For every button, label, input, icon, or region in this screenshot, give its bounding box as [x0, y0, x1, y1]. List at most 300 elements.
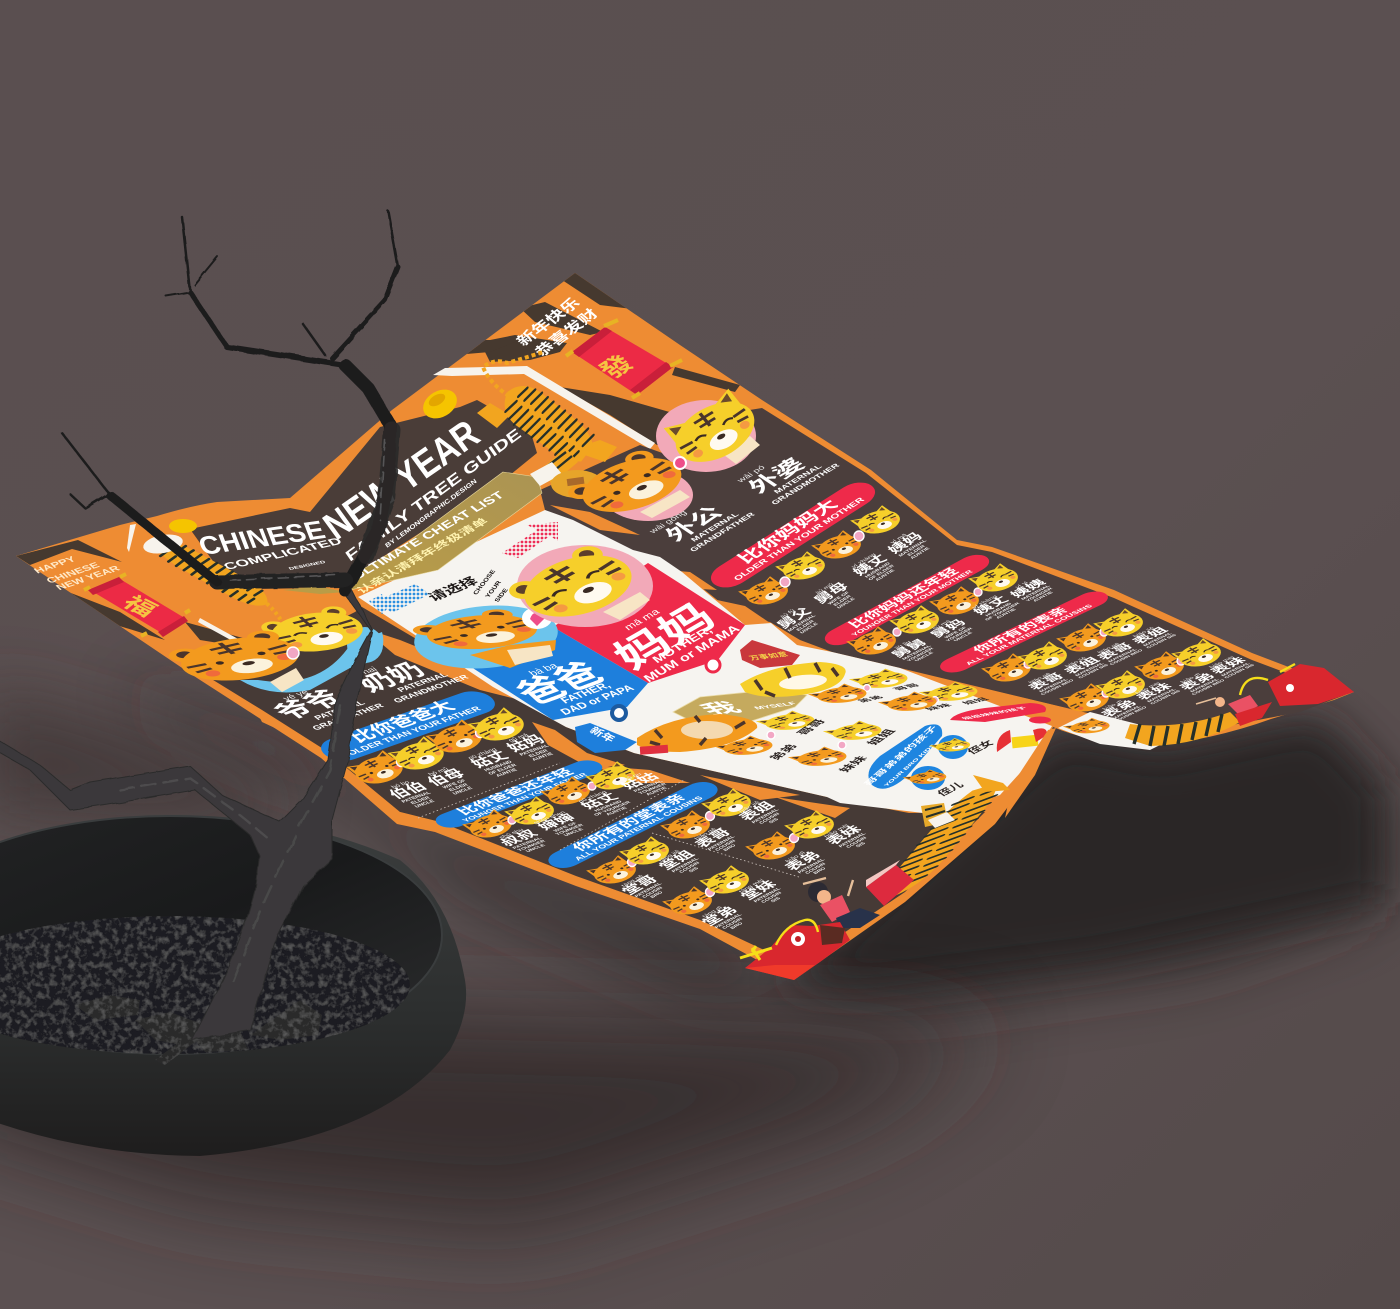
family list: maternal younger than mother: [818, 551, 1061, 666]
title: Chinese: CHINESE: [195, 516, 329, 561]
pill: your sis kids: 姐姐妹妹的孩子: [959, 706, 1029, 720]
family list: maternal younger than mother: HUSBAND: [985, 602, 1013, 617]
family list: siblings on white panel: 妹妹: [922, 703, 955, 711]
family list: paternal older than father: PATERNAL: [400, 791, 433, 804]
family list: maternal younger than mother: OF YOUNGER: [984, 602, 1022, 622]
family list: paternal older than father: 伯母: [423, 767, 469, 788]
family list: paternal younger than father: [427, 756, 675, 856]
greeting: happy chinese new year: [32, 555, 123, 592]
pill: your bro kids: YOUR BRO KIDS: [883, 743, 937, 788]
family list: paternal cousins: PATERNAL: [751, 808, 780, 824]
kids circles: 侄女: [964, 738, 996, 756]
family list: maternal younger than mother: UNCLE: [914, 651, 936, 662]
panel: central white panel: [358, 510, 1052, 813]
pill: all your paternal cousins: 你所有的堂表亲: [568, 791, 690, 854]
family list: siblings on white panel: 妹妹: [835, 755, 871, 773]
family list: paternal younger than father: shū shu: [498, 828, 526, 840]
pill: all your maternal cousins: 你所有的表亲: [969, 605, 1072, 655]
pill: your bro kids: 哥哥弟弟的孩子: [862, 724, 940, 787]
panel: mother red: [553, 563, 745, 683]
family list: maternal cousins: COUSIN BRO: [1109, 649, 1145, 666]
tree: [0, 211, 398, 1040]
panel: right family panel background: [540, 408, 1345, 735]
pill: older than your father: [312, 687, 503, 765]
bowl: [0, 815, 466, 1156]
tree trunk: [0, 588, 372, 1040]
family list: maternal cousins: biǎo mèi: [1134, 682, 1162, 695]
family list: paternal older than father: ELDER: [448, 783, 470, 793]
tag: blue new year lantern: 新年: [587, 725, 618, 744]
family list: paternal younger than father: UNCLE: [563, 827, 586, 837]
family list: maternal cousins: biǎo dì: [1180, 673, 1203, 684]
family list: paternal older than father: 姑妈: [503, 732, 549, 754]
family list: paternal older than father: gū mā: [507, 733, 531, 743]
pill: younger than your mother: [818, 551, 996, 649]
choose your side text: CHOOSE: [472, 569, 498, 596]
family list: paternal cousins: 表姐: [735, 799, 778, 823]
tiger pairs: [584, 787, 842, 919]
grandparents labels: PATERNAL: [395, 671, 451, 693]
panel: left family panel background: [205, 607, 985, 965]
family list: paternal cousins: biǎo jiě: [738, 800, 762, 814]
gold tag: myself: [673, 690, 807, 723]
banner: red scroll fa: 發: [593, 351, 640, 383]
family list: maternal cousins: COUSIN SIS: [1145, 634, 1178, 649]
family list: siblings on white panel: 哥哥: [891, 683, 923, 691]
kids circles: [901, 735, 996, 798]
family list: maternal cousins: biǎo mèi: [1208, 656, 1236, 669]
family list: paternal cousins: BRO: [649, 891, 665, 899]
icon: heart bead: [674, 457, 686, 469]
family list: maternal younger than mother: 姨丈: [970, 594, 1012, 617]
panel: title header: [190, 400, 537, 578]
family list: paternal cousins: PATERNAL: [707, 835, 736, 851]
orange border wedges: [255, 505, 1114, 825]
choose your side text: 请选择: [425, 574, 482, 604]
family list: paternal older than father: 姑丈: [467, 749, 513, 770]
family list: paternal cousins: biǎo mèi: [823, 823, 851, 839]
illustration: red dragon: [740, 920, 850, 980]
family list: maternal older than mother: 姨妈: [884, 530, 926, 556]
family list: maternal older than mother: MATERNAL: [787, 614, 817, 633]
designer credit: [288, 477, 478, 571]
subtitle: complicated: COMPLICATED: [220, 535, 345, 572]
family list: paternal younger than father: WIFE OF: [552, 822, 579, 833]
tiger pairs: [736, 504, 908, 609]
family list: paternal younger than father: shěn shen: [532, 810, 568, 825]
family list: paternal cousins: SIS: [770, 896, 783, 903]
family list: paternal older than father: HUSBAND: [483, 760, 514, 773]
family list: paternal cousins: táng gē: [620, 874, 646, 888]
family list: maternal younger than mother: yí zhàng: [971, 595, 999, 609]
family list: paternal cousins: biǎo gē: [693, 827, 719, 841]
family list: maternal younger than mother: YOUNGER: [1025, 587, 1055, 602]
family list: paternal cousins: PATERNAL: [753, 887, 782, 903]
family list: paternal younger than father: YOUNGER: [516, 839, 548, 852]
family list: maternal cousins: 表弟: [1175, 671, 1218, 692]
banner: red scroll fu: [84, 574, 190, 637]
tag: red lantern: 万事如意: [747, 651, 790, 662]
family list: paternal cousins: PATERNAL: [838, 832, 867, 848]
family list: maternal cousins: biǎo jiě: [1064, 656, 1089, 668]
family list: maternal younger than mother: jiù mā: [931, 619, 953, 631]
maternal grandparents labels: MATERNAL: [689, 511, 741, 543]
family list: maternal younger than mother: YOUNGER: [945, 627, 975, 642]
grandparents labels: 爷爷: [269, 686, 349, 725]
family list: maternal older than mother: UNCLE: [836, 596, 857, 610]
family list: maternal older than mother: yí mā: [889, 532, 909, 545]
family list: paternal cousins: COUSIN: [804, 862, 828, 875]
family list: paternal younger than father: 叔叔: [496, 828, 542, 848]
family list: maternal older than mother: ELDER: [832, 594, 853, 607]
family list: paternal cousins: táng jiě: [657, 849, 683, 863]
banner: red scroll fa: [566, 320, 682, 398]
family list: paternal cousins: COUSIN: [760, 891, 784, 904]
family list: paternal cousins: PATERNAL: [634, 882, 663, 898]
family list: paternal cousins: BRO: [722, 844, 738, 852]
family list: maternal cousins: 表妹: [1132, 681, 1176, 702]
choose your side text: YOUR: [484, 580, 503, 599]
illustration: mother tiger: [502, 542, 653, 629]
family list: maternal cousins: COUSIN BRO: [1040, 679, 1076, 696]
illustration: maternal grandparents tigers: [561, 387, 767, 522]
family list: paternal cousins: 堂哥: [619, 874, 661, 897]
family list: siblings on white panel: [712, 668, 992, 773]
family list: paternal cousins: 表弟: [781, 849, 824, 873]
greeting: top right: 新年快乐: [513, 295, 584, 349]
family list: maternal older than mother: UNCLE: [799, 621, 820, 635]
family list: paternal older than father: PATERNAL: [518, 744, 551, 757]
designer credit: BY LEMONGRAPHIC.DESIGN: [384, 477, 478, 549]
family list: maternal older than mother: ELDER: [906, 544, 927, 557]
pill: older than your father: OLDER THAN YOUR FATHER: [345, 705, 484, 757]
family list: paternal younger than father: AUNTIE: [605, 806, 630, 816]
grandparents labels: 奶奶: [352, 658, 432, 697]
icon: heart: [522, 607, 552, 629]
family list: paternal older than father: ELDER: [410, 796, 432, 806]
tiger stripes on poster border: [16, 272, 740, 650]
family list: maternal younger than mother: WIFE OF: [944, 627, 968, 639]
family list: siblings on white panel: 弟弟: [765, 743, 801, 761]
maternal grandparents labels: MATERNAL: [772, 463, 824, 495]
family list: maternal older than mother: [702, 477, 937, 639]
family list: maternal cousins: COUSIN SIS: [1223, 664, 1256, 679]
family list: maternal younger than mother: 舅舅: [888, 637, 930, 660]
pill: all your paternal cousins: ALL YOUR PATERNAL COUSINS: [573, 795, 705, 862]
family list: maternal cousins: MATERNAL: [1221, 662, 1252, 677]
illustration: drummer boy: [803, 878, 880, 928]
family list: maternal cousins: 表姐: [1128, 625, 1171, 646]
maternal grandparents labels: [646, 439, 841, 558]
family list: paternal older than father: bó mǔ: [427, 767, 451, 777]
family list: paternal cousins: [418, 763, 878, 935]
family list: maternal older than mother: ELDER: [795, 619, 816, 632]
family list: paternal cousins: PATERNAL: [671, 857, 700, 873]
tag: blue new year lantern: [575, 723, 637, 753]
family list: paternal younger than father: gū zhàng: [577, 790, 609, 804]
father label: FATHER,: [559, 681, 614, 706]
family list: maternal cousins: 表妹: [1206, 655, 1250, 676]
family list: maternal older than mother: HUSBAND: [865, 562, 892, 579]
family list: maternal younger than mother: 姨姨: [1007, 577, 1050, 600]
family list: maternal cousins: biǎo gē: [1028, 672, 1053, 684]
pill: older than your mother: 比你妈妈大: [734, 497, 843, 567]
family list: paternal older than father: gū zhàng: [467, 747, 499, 761]
family list: paternal younger than father: UNCLE: [525, 843, 548, 853]
family list: maternal cousins: MATERNAL: [1108, 648, 1139, 663]
family list: paternal cousins: COUSIN: [845, 836, 869, 849]
family list: maternal younger than mother: YOUNGER: [906, 647, 936, 662]
family list: paternal cousins: 堂弟: [698, 904, 741, 928]
family list: paternal older than father: WIFE OF: [441, 779, 468, 790]
father label: DAD or PAPA: [558, 683, 637, 717]
family list: maternal cousins: MATERNAL: [1112, 705, 1143, 720]
family list: paternal cousins: COUSIN: [714, 839, 738, 852]
illustration: lower right striped tiger: [870, 728, 1056, 903]
illustration: right fold tiger on white strip: [1058, 702, 1272, 750]
family list: maternal younger than mother: 舅妈: [927, 617, 969, 640]
family list: maternal cousins: COUSIN SIS: [1149, 690, 1182, 705]
family list: paternal younger than father: 姑姑: [617, 771, 663, 791]
maternal grandparents labels: wài gōng: [646, 509, 689, 535]
pill: your sis kids: [950, 703, 1051, 724]
tiger pairs: [979, 607, 1229, 716]
pill: younger than your father: YOUNGER THAN YOUR FATHER: [460, 772, 590, 823]
family list: maternal cousins: MATERNAL: [1039, 678, 1070, 693]
mother label: mā ma: [622, 607, 663, 633]
gold tag: ultimate cheat list: [283, 472, 542, 596]
family list: maternal younger than mother: AUNTIE: [995, 607, 1018, 620]
poster paper base: [16, 273, 1354, 980]
tiger pairs: [844, 562, 1026, 659]
family list: maternal cousins: biǎo jiě: [1132, 626, 1157, 638]
family list: maternal cousins: MATERNAL: [1075, 662, 1106, 677]
family list: paternal older than father: AUNTIE: [531, 752, 555, 762]
family list: paternal younger than father: gū gu: [622, 772, 644, 782]
family list: siblings on white panel: 姐姐: [960, 697, 992, 705]
family list: paternal cousins: táng mèi: [738, 878, 766, 894]
mother label: 妈妈: [605, 596, 725, 677]
pill: all your maternal cousins: ALL YOUR MATERNAL COUSINS: [964, 603, 1094, 666]
family list: paternal cousins: PATERNAL: [714, 913, 743, 929]
title: New Year: NEW YEAR: [316, 412, 487, 548]
pill: older than your father: 比你爸爸大: [345, 698, 460, 746]
choose your side text: SIDE: [494, 587, 510, 603]
family list: maternal cousins: [933, 588, 1257, 723]
family list: paternal cousins: BRO: [812, 867, 828, 875]
pill: younger than your father: 比你爸爸还年轻: [452, 766, 577, 817]
family list: maternal cousins: 表哥: [1024, 671, 1067, 692]
family list: maternal older than mother: 舅母: [811, 580, 852, 606]
pill: older than your mother: [702, 477, 883, 593]
icon: gold ingot left: [169, 519, 197, 533]
icon: rings on panels: [612, 658, 720, 720]
family list: paternal older than father: OF ELDER: [487, 763, 518, 776]
subtitle: family tree guide: FAMILY TREE GUIDE: [342, 425, 524, 565]
family list: paternal cousins: BRO: [729, 922, 745, 930]
illustration: top striped tiger: [477, 352, 617, 498]
tiger pairs row: [344, 706, 533, 789]
mother label: [597, 585, 743, 686]
family list: maternal cousins: COUSIN BRO: [1113, 706, 1149, 723]
family list: paternal cousins: COUSIN: [721, 917, 745, 930]
pill: older than your mother: OLDER THAN YOUR MOTHER: [732, 496, 866, 582]
gold tag: ultimate cheat list: ULTIMATE CHEAT LIST: [350, 490, 507, 582]
arrow: dotted blue: [369, 584, 430, 614]
tiger pairs: [712, 668, 987, 769]
family list: paternal cousins: 堂姐: [656, 849, 698, 872]
family list: paternal cousins: 堂妹: [738, 879, 780, 902]
illustration: father tiger: [406, 600, 560, 674]
family list: maternal cousins: biǎo gē: [1097, 642, 1122, 654]
illustration: red envelope and ingot: [997, 728, 1047, 752]
bowl body: [0, 815, 466, 1156]
family list: siblings on white panel: 哥哥: [794, 718, 829, 736]
grandparents labels: GRANDFATHER: [310, 702, 386, 732]
tiger pairs row: [460, 760, 643, 842]
illustration: left striped tiger: [142, 532, 292, 642]
family list: siblings on white panel: 弟弟: [854, 695, 887, 703]
family list: paternal cousins: táng dì: [701, 905, 725, 919]
family list: paternal older than father: ELDER: [528, 749, 550, 759]
family list: maternal cousins: MATERNAL: [1147, 688, 1178, 703]
father label: bà ba: [527, 662, 561, 678]
family list: maternal younger than mother: UNCLE: [953, 631, 975, 642]
family list: maternal older than mother: AUNTIE: [909, 546, 932, 560]
family list: maternal older than mother: 舅父: [774, 605, 815, 631]
family list: maternal older than mother: 姨丈: [849, 552, 891, 578]
family list: paternal older than father: UNCLE: [414, 799, 437, 809]
family list: paternal younger than father: 婶婶: [533, 811, 580, 832]
greeting: happy chinese new year: HAPPY: [32, 555, 78, 575]
father label: 爸爸: [509, 657, 612, 711]
grandparents labels: PATERNAL: [312, 699, 368, 721]
family list: maternal older than mother: jiù fù: [778, 608, 797, 620]
family list: maternal older than mother: WIFE OF: [828, 591, 851, 606]
family list: paternal younger than father: PATERNAL: [511, 837, 544, 850]
family list: paternal younger than father: HUSBAND: [593, 800, 624, 813]
family list: paternal older than father: AUNTIE: [495, 768, 519, 778]
family list: paternal younger than father: AUNTIE: [645, 786, 670, 796]
family list: maternal cousins: biǎo dì: [1102, 700, 1125, 711]
family list: maternal younger than mother: MATERNAL: [902, 645, 933, 661]
family list: paternal younger than father: YOUNGER: [554, 823, 586, 836]
tag: red lantern: [740, 640, 800, 668]
family list: paternal older than father: bó bo: [390, 780, 412, 790]
maternal grandparents labels: GRANDFATHER: [688, 511, 757, 553]
grandparents labels: nǎi nai: [344, 665, 380, 682]
family list: maternal older than mother: jiù mǔ: [814, 582, 836, 596]
maternal grandparents labels: 外公: [660, 503, 728, 545]
family list: paternal cousins: SIS: [688, 866, 701, 873]
choose your side text: [425, 569, 510, 604]
bowl inner wall: [0, 816, 442, 1054]
father label: [504, 648, 637, 723]
family list: paternal cousins: biǎo dì: [784, 850, 808, 864]
white line border: [433, 366, 655, 449]
family list: maternal cousins: 表姐: [1060, 655, 1103, 676]
gold tag: myself: 我: [695, 699, 747, 718]
family list: maternal older than mother: OF ELDER: [867, 564, 896, 582]
icon: heart bead: [287, 647, 299, 659]
rocks: [75, 995, 322, 1065]
family list: maternal older than mother: AUNTIE: [874, 568, 897, 582]
family list: maternal cousins: 表弟: [1097, 698, 1140, 719]
grandparents labels: [264, 646, 471, 736]
maternal grandparents labels: wài pó: [734, 464, 767, 484]
family list: maternal older than mother: yí zhàng: [850, 552, 878, 569]
arrow: dotted red: [502, 522, 558, 558]
illustration: grandparents tigers left: [162, 604, 383, 692]
mother label: MOTHER,: [649, 624, 715, 665]
family list: paternal cousins: COUSIN: [758, 812, 782, 825]
family list: paternal older than father: UNCLE: [452, 786, 475, 796]
gold tag: myself: MYSELF: [752, 701, 798, 711]
family list: paternal younger than father: PATERNAL: [632, 780, 665, 793]
family list: maternal cousins: COUSIN BRO: [1191, 679, 1227, 696]
icon: gold ingot: [418, 384, 462, 424]
upper branch: [345, 365, 390, 590]
shadows cast on the table: [0, 680, 1385, 1230]
greeting: top right: 恭喜发财: [531, 306, 602, 360]
soil: [0, 916, 410, 1054]
family list: paternal cousins: PATERNAL: [797, 858, 826, 874]
greeting: happy chinese new year: CHINESE: [44, 561, 102, 585]
family list: paternal older than father: 伯伯: [385, 780, 431, 801]
family list: paternal cousins: COUSIN: [678, 861, 702, 874]
pill: all your paternal cousins: [541, 778, 724, 872]
family list: maternal cousins: COUSIN SIS: [1077, 664, 1110, 679]
banner: red scroll fu: 福: [117, 592, 162, 621]
family list: paternal younger than father: YOUNGER: [637, 782, 669, 795]
pill: younger than your mother: YOUNGER THAN YOUR MOTHER: [850, 568, 975, 637]
family list: maternal cousins: 表哥: [1093, 641, 1136, 662]
mother label: MUM or MAMA: [641, 622, 743, 684]
pill: younger than your father: [427, 756, 609, 831]
family list: paternal cousins: COUSIN: [641, 886, 665, 899]
family list: paternal younger than father: OF YOUNGER: [593, 801, 633, 817]
kids circles: 侄儿: [935, 780, 966, 798]
family list: siblings on white panel: 姐姐: [863, 728, 899, 746]
family list: paternal cousins: SIS: [855, 841, 868, 848]
family list: maternal cousins: MATERNAL: [1143, 632, 1174, 647]
maternal grandparents labels: 外婆: [743, 455, 811, 497]
family list: paternal older than father: [312, 687, 561, 811]
illustration: myself tigers: [637, 662, 846, 755]
pill: all your maternal cousins: [933, 588, 1114, 676]
gold tag: ultimate cheat list: 认亲认清拜年终极清单: [354, 515, 491, 596]
family list: maternal younger than mother: AUNTIE: [1032, 590, 1055, 603]
family list: maternal younger than mother: yí yi: [1015, 581, 1030, 589]
family list: paternal younger than father: 姑丈: [577, 791, 623, 811]
poster: [16, 272, 1354, 980]
illustration: right corner dragon and boy: [1196, 664, 1354, 716]
panel: father blue: [465, 627, 648, 720]
greeting: top right: [513, 295, 602, 360]
family list: maternal younger than mother: MATERNAL: [1021, 585, 1052, 601]
icon: gold coin: [551, 470, 603, 498]
maternal grandparents labels: GRANDMOTHER: [769, 462, 841, 506]
greeting: happy chinese new year: NEW YEAR: [54, 564, 123, 592]
grandparents labels: GRANDMOTHER: [391, 673, 471, 704]
family list: maternal cousins: MATERNAL: [1190, 678, 1221, 693]
illustration: red chest: [866, 860, 914, 906]
grandparents labels: yé ye: [281, 688, 312, 703]
family list: maternal younger than mother: jiù jiu: [893, 640, 912, 651]
family list: maternal older than mother: MATERNAL: [898, 539, 928, 558]
pill: younger than your mother: 比你妈妈还年轻: [845, 565, 962, 630]
family list: paternal cousins: 表妹: [822, 823, 865, 847]
